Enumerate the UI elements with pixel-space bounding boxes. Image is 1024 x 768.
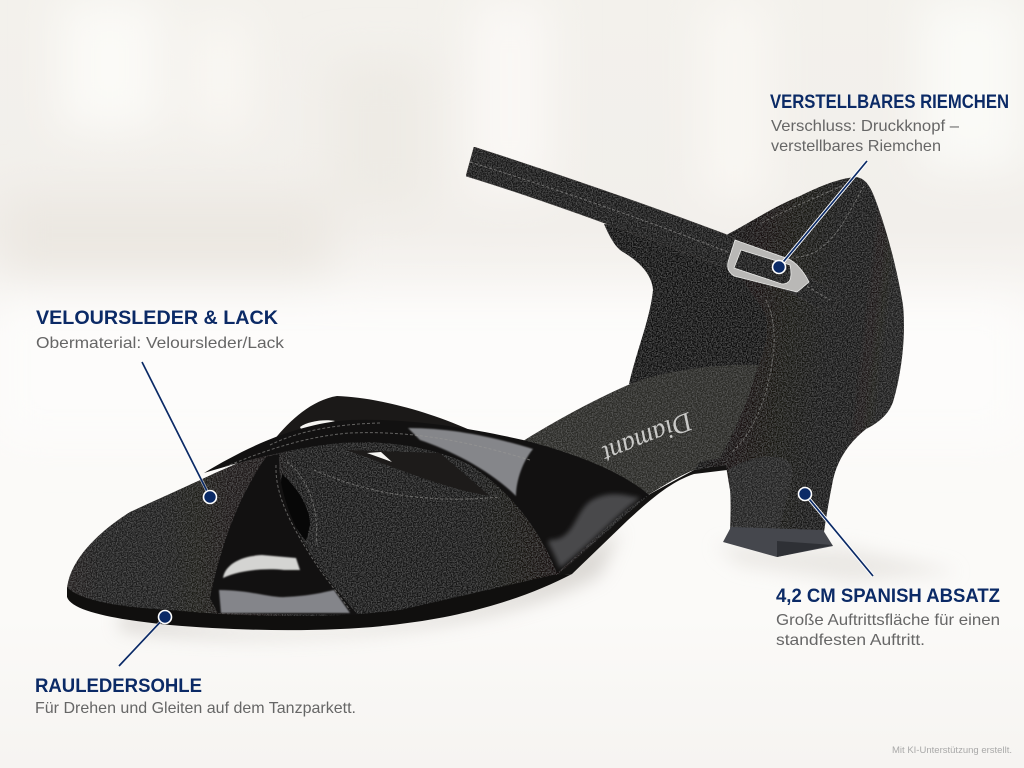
sole edge: [67, 574, 572, 630]
heading: sole: RAULEDERSOHLE: [35, 675, 202, 697]
heel counter and heel: [694, 177, 904, 532]
cutout background gaps: [300, 420, 392, 462]
leader line and dot: sole: [119, 610, 172, 666]
callout: leather sole: [35, 610, 356, 717]
heading: heel: 4,2 CM SPANISH ABSATZ: [776, 585, 1000, 607]
vamp cutout dark holes: [280, 474, 310, 541]
leader line and dot: strap: [772, 161, 867, 274]
ankle strap: [466, 147, 838, 318]
stitching: [225, 186, 864, 610]
patent highlight grey: [408, 428, 533, 496]
sole under arch: [557, 465, 727, 575]
heading: material: VELOURSLEDER & LACK: [36, 307, 278, 329]
insole: [523, 365, 772, 495]
patent highlight lower: [548, 494, 640, 568]
strap highlight grey bottom: [219, 590, 350, 613]
text: strap line two: verstellbares Riemchen: [771, 138, 941, 155]
heel tip: [723, 527, 833, 557]
text: heel: Große Auftrittsfläche für einen: [776, 612, 1000, 629]
leader line and dot: material: [142, 362, 216, 504]
callout: heel: [776, 488, 1000, 649]
inner back lining: [604, 224, 775, 384]
heel inner face: [728, 456, 793, 536]
front patent strap: [210, 454, 358, 615]
text: heel line two: standfesten Auftritt.: [776, 632, 925, 649]
text: material: Obermaterial: Veloursleder/Lack: [36, 335, 285, 352]
insole brand logo: Diamant: [597, 406, 698, 470]
shoe vamp and sole: [67, 436, 650, 628]
rear patent loop strap: [274, 396, 470, 448]
AI credit note: Mit KI-Unterstützung erstellt.: [892, 745, 1012, 756]
callout: adjustable strap: [770, 91, 1009, 274]
shoe photo illustration: [67, 147, 904, 630]
metal buckle: [728, 240, 809, 292]
text: strap: Verschluss: Druckknopf –: [771, 118, 959, 135]
shoe cast shadow: [120, 530, 960, 638]
callout: suede and patent: [36, 307, 285, 504]
strap highlight white: [223, 555, 300, 578]
crossing patent band: [204, 420, 649, 573]
leader line and dot: heel: [798, 488, 873, 576]
text: sole: Für Drehen und Gleiten auf dem Tanzparkett.: [35, 700, 356, 717]
